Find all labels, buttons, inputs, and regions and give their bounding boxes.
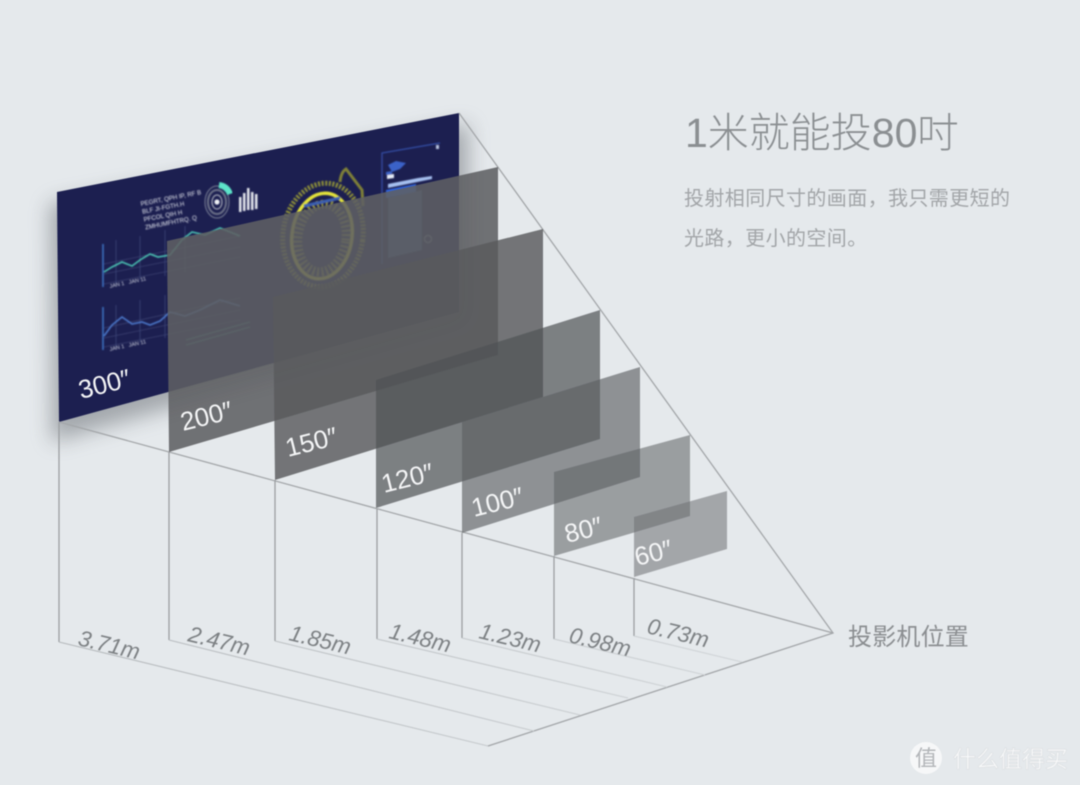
panel: 150 inch: 150″ bbox=[282, 421, 340, 463]
screen line chart: lower bbox=[103, 295, 250, 350]
distance label: 0.98m: 0.98m bbox=[567, 623, 633, 661]
description text bbox=[684, 187, 1010, 250]
screen text block: PEGRT, QPH IP, RF B bbox=[140, 189, 202, 208]
distance label: 1.23m: 1.23m bbox=[477, 619, 543, 657]
panel: 150 inch bbox=[273, 229, 543, 480]
panel: 120 inch bbox=[376, 310, 600, 508]
panel: 80 inch bbox=[554, 435, 690, 556]
projection lines bbox=[59, 113, 833, 746]
screen axis labels: JAN 1 JAN 11 bbox=[109, 276, 147, 290]
distance label: 2.47m: 2.47m bbox=[185, 621, 252, 660]
panel: 60 inch bbox=[631, 491, 727, 577]
screen text block bbox=[140, 189, 206, 232]
screen text block: BLF JI-FGTH.H bbox=[142, 201, 185, 216]
panel: 100 inch bbox=[462, 367, 640, 533]
screen text block: PFCOL QIH H bbox=[143, 209, 183, 224]
screen bar chart bbox=[239, 188, 258, 212]
icon: watermark badge bbox=[910, 742, 942, 774]
panel: 120 inch: 120″ bbox=[378, 457, 436, 499]
distance label: 1.85m: 1.85m bbox=[287, 621, 353, 659]
distance label: 1.48m: 1.48m bbox=[387, 619, 453, 657]
screen line chart: upper bbox=[103, 226, 240, 287]
panel: 80 inch: 80″ bbox=[561, 510, 605, 549]
panel: 60 inch: 60″ bbox=[631, 533, 675, 572]
vertical drop lines bbox=[59, 422, 634, 642]
screen axis labels bbox=[109, 276, 147, 353]
screen ring chart bbox=[205, 185, 230, 218]
projector position label: 投影机位置 bbox=[848, 624, 969, 651]
description text: 投射相同尺寸的画面，我只需更短的 bbox=[684, 187, 1010, 210]
distance label: 0.73m: 0.73m bbox=[645, 614, 711, 652]
panel shadow bbox=[50, 124, 468, 442]
screen gauge bbox=[276, 169, 370, 292]
distance label: 3.71m: 3.71m bbox=[76, 626, 142, 664]
screen phone panel bbox=[382, 143, 440, 264]
panel: 200 inch: 200″ bbox=[177, 395, 235, 437]
screen text block: ZMHUMFHTRQ. Q bbox=[145, 215, 198, 232]
panel: 100 inch: 100″ bbox=[468, 481, 526, 523]
size label: 300 inch: 300″ bbox=[75, 363, 133, 405]
icon: watermark badge: 值 bbox=[915, 746, 937, 771]
title: 1米就能投80吋 bbox=[685, 110, 958, 156]
panel: 200 inch bbox=[167, 167, 498, 452]
watermark: 什么值得买 bbox=[953, 746, 1068, 772]
watermark bbox=[910, 742, 1068, 774]
panel: 300 inch screen bbox=[57, 113, 459, 422]
screen axis labels: JAN 1 JAN 11 bbox=[109, 339, 147, 353]
floor lines bbox=[59, 636, 742, 746]
description text: 光路，更小的空间。 bbox=[684, 227, 868, 250]
